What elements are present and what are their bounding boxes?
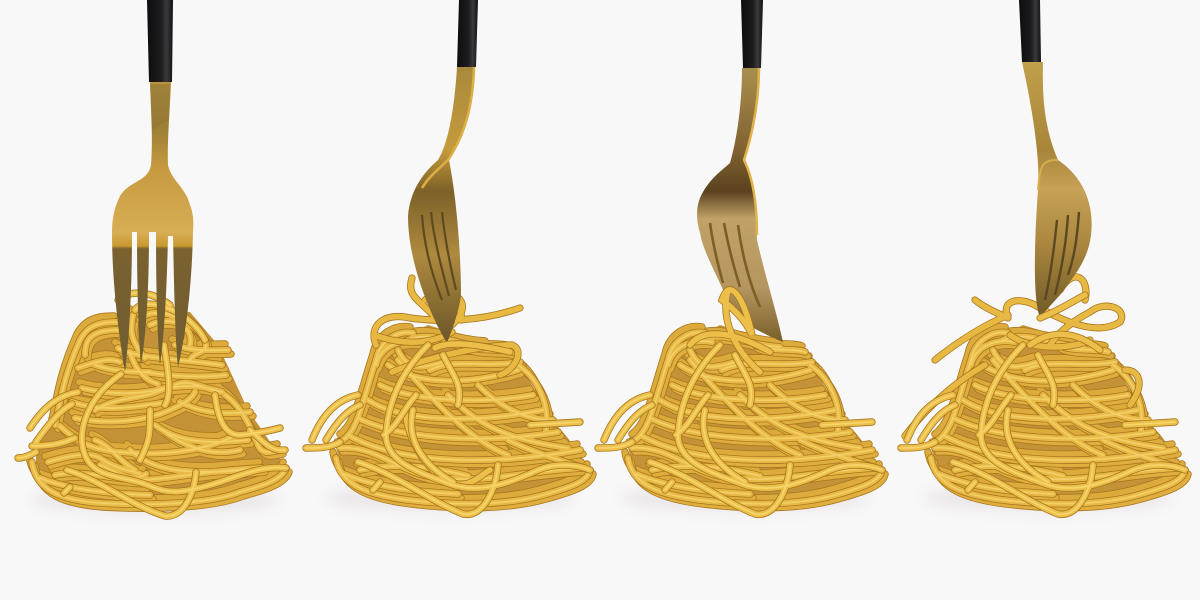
pile shadows xyxy=(30,484,1173,514)
pile 3 front strands xyxy=(598,290,882,514)
fork 4 xyxy=(1019,0,1092,317)
fork 2 xyxy=(408,0,478,343)
spaghetti pile 4 with fork xyxy=(901,0,1188,514)
spaghetti pile 3 with fork xyxy=(598,0,885,514)
pile 1 body xyxy=(18,293,289,516)
pile 4 body xyxy=(905,277,1188,508)
pile 4 front strands xyxy=(901,295,1185,514)
spaghetti pile 1 with fork xyxy=(18,0,289,516)
pile 2 body xyxy=(333,278,593,508)
spaghetti pile 2 with fork xyxy=(306,0,593,514)
pile 3 body xyxy=(625,325,885,508)
pile 2 front strands xyxy=(306,344,590,514)
fork 1 xyxy=(112,0,193,372)
fork 3 xyxy=(697,0,783,342)
